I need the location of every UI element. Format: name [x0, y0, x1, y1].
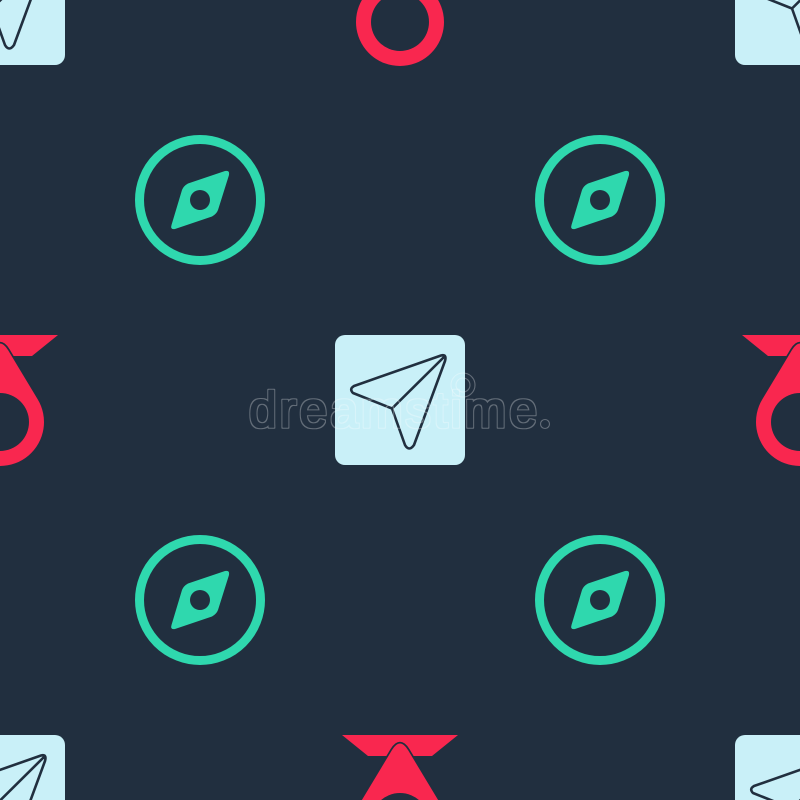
icon: red bell, left edge: [0, 335, 58, 466]
icon: compass, upper left: [140, 140, 260, 260]
icon: paper plane tile, center: [335, 335, 465, 465]
watermark: dreamstime: [249, 382, 537, 438]
icon: compass, lower right: [540, 540, 660, 660]
icon: paper plane tile, bottom right: [735, 735, 800, 800]
icon: compass, lower left: [140, 540, 260, 660]
icon: paper plane tile, top right: [735, 0, 800, 65]
icon: paper plane tile, bottom left: [0, 735, 65, 800]
icon: red bell, right edge: [742, 335, 800, 466]
icon: red bell, bottom edge: [342, 735, 458, 800]
icon: red bell, top edge: [342, 0, 458, 66]
icon: compass, upper right: [540, 140, 660, 260]
icon: paper plane tile, top left: [0, 0, 65, 65]
